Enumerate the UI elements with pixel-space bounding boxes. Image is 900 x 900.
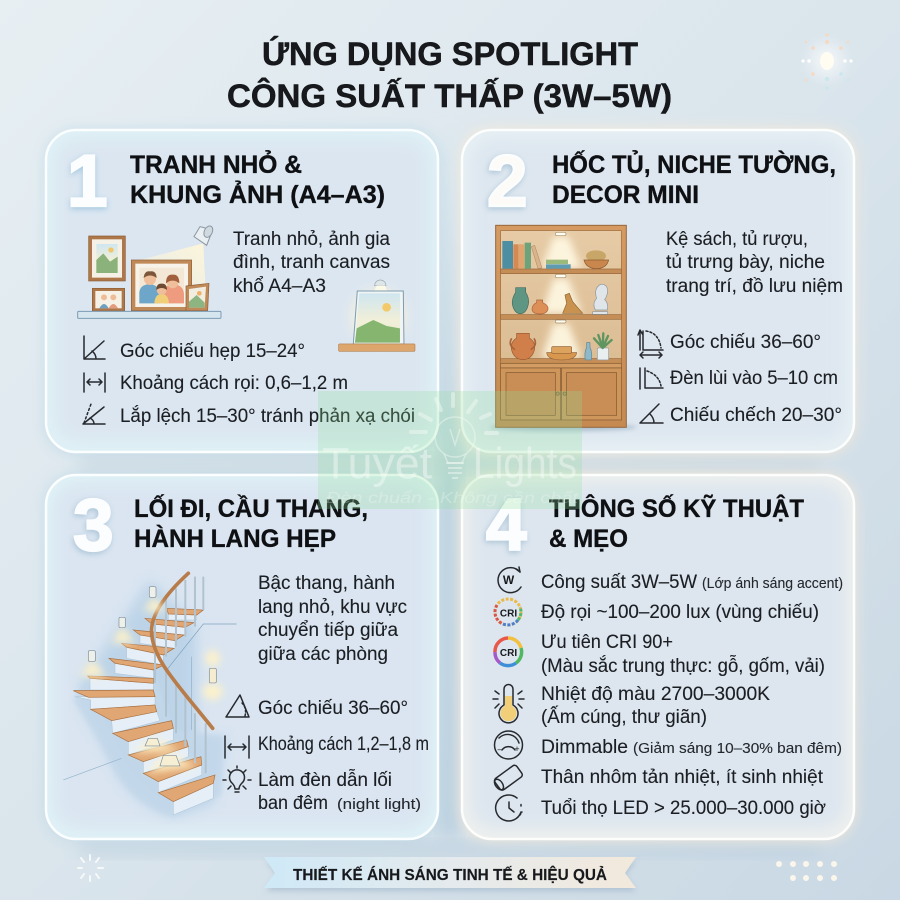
number 4: 4 (486, 485, 527, 566)
title (227, 35, 672, 114)
item: night light (223, 766, 421, 814)
light pools (542, 237, 582, 358)
spec: dimmable: + (514, 744, 520, 754)
description 2: trang trí, đồ lưu niệm (666, 276, 843, 297)
heading 4 (549, 493, 804, 553)
spec: thân nhôm (493, 764, 824, 791)
spec: công suất: Công suất 3W–5W (541, 572, 697, 593)
pottery (510, 333, 612, 360)
description 3: giữa các phòng (258, 644, 388, 665)
illustration: curved staircase with step lights (63, 573, 237, 817)
books (502, 241, 571, 269)
heading 3: HÀNH LANG HẸP (134, 524, 336, 553)
spec: độ rọi (495, 599, 819, 625)
description 1 (233, 229, 390, 297)
spec: nhiệt độ màu: (Ấm cúng, thư giãn) (541, 706, 707, 728)
watermark: Tuyết Lights: Lights (473, 439, 577, 488)
description 2 (666, 229, 843, 297)
watermark bulb icon (411, 394, 497, 478)
panel 4 card (459, 472, 857, 842)
item: lắp lệch: Lắp lệch 15–30° tránh phản xạ chói (120, 405, 415, 427)
illustration: framed photos on a shelf with spotlight (78, 225, 415, 351)
decoration: sparkle bottom left (78, 855, 103, 881)
wall and step lights (80, 587, 223, 773)
spotlight lamp (194, 225, 214, 245)
item: khoảng cách (225, 734, 429, 758)
number 3: 3 (73, 485, 114, 566)
number 1: 1 (67, 143, 108, 224)
spec: dimmable: Dimmable (541, 737, 628, 758)
description 3: chuyển tiếp giữa (258, 620, 398, 641)
panel 3 card (43, 472, 441, 842)
bowl of decor (584, 250, 609, 269)
panel: 1 tranh nhỏ và khung ảnh (43, 128, 441, 456)
spec: CRI 90+: Ưu tiên CRI 90+ (541, 632, 673, 653)
spec: dimmable: – (497, 744, 503, 754)
number 3: 3 (72, 487, 113, 568)
item: góc chiếu (638, 330, 821, 358)
spec: độ rọi: CRI (500, 608, 517, 620)
spec: tuổi thọ: Tuổi thọ LED > 25.000–30.000 giờ (541, 798, 826, 819)
balusters (155, 577, 206, 773)
number 2: 2 (487, 141, 528, 222)
watermark: Tuyết Lights: Tuyết (322, 439, 432, 488)
heading 2: DECOR MINI (552, 181, 699, 209)
panel: 2 hốc tủ, niche tường, decor mini (459, 127, 857, 455)
spec: CRI 90+ (495, 632, 825, 677)
item: khoảng cách rọi: Khoảng cách rọi: 0,6–1,2 m (120, 373, 348, 394)
item: khoảng cách: Khoảng cách 1,2–1,8 m (258, 734, 429, 755)
heading 1: TRANH NHỎ & (130, 149, 302, 179)
description 2: Kệ sách, tủ rượu, (666, 229, 808, 250)
item: đèn lùi vào: Đèn lùi vào 5–10 cm (670, 368, 838, 389)
heading 4: & MẸO (549, 525, 628, 553)
description 3: Bậc thang, hành (258, 573, 395, 594)
description 3 (258, 573, 407, 665)
item: góc chiếu hẹp: Góc chiếu hẹp 15–24° (120, 341, 305, 362)
heading 2: HỐC TỦ, NICHE TƯỜNG, (552, 149, 836, 179)
watermark: Tuyết Lights (318, 391, 582, 509)
number 4: 4 (485, 487, 526, 568)
panel: 4 thông số kỹ thuật và mẹo (459, 472, 857, 842)
item: night light: (night light) (337, 797, 421, 813)
stairs treads (73, 608, 215, 802)
spec: nhiệt độ màu: Nhiệt độ màu 2700–3000K (541, 684, 770, 705)
description 1: khổ A4–A3 (233, 276, 326, 297)
spec: dimmable (494, 731, 842, 759)
decoration: dots bottom right (776, 861, 837, 881)
spec: nhiệt độ màu (493, 684, 770, 728)
frame: family (131, 260, 192, 311)
banner: tagline: THIẾT KẾ ÁNH SÁNG TINH TẾ & HIỆU QUẢ (293, 865, 607, 884)
watermark: Tuyết Lights: Đèn chuẩn - Không cần chất (326, 489, 579, 507)
panel 1 card (43, 128, 441, 456)
spec: công suất: (Lớp ánh sáng accent) (702, 576, 843, 592)
icon: sparkle sun top right (801, 33, 853, 90)
spec: tuổi thọ (496, 795, 826, 821)
illustration: wooden cabinet with lights (490, 225, 637, 431)
frame: small right (186, 283, 209, 311)
stairs risers (75, 614, 213, 815)
title: ỨNG DỤNG SPOTLIGHT (262, 35, 638, 72)
spot lights (555, 232, 566, 323)
item: góc chiếu: Góc chiếu 36–60° (258, 698, 408, 719)
heading 3: LỐI ĐI, CẦU THANG, (134, 493, 368, 523)
spec: CRI 90+: CRI (500, 648, 517, 659)
item: night light: ban đêm (258, 793, 328, 814)
heading 4: THÔNG SỐ KỸ THUẬT (549, 493, 804, 523)
heading 2 (552, 149, 836, 209)
heading 3 (134, 493, 368, 553)
number 1: 1 (67, 141, 108, 222)
canvas with lamp (339, 280, 415, 351)
number 2: 2 (486, 143, 527, 224)
description 3: lang nhỏ, khu vực (258, 597, 407, 618)
item: night light: Làm đèn dẫn lối (258, 769, 392, 791)
title: CÔNG SUẤT THẤP (3W–5W) (227, 76, 672, 114)
panel 2 card (459, 127, 857, 455)
frame: couple (92, 288, 125, 311)
item: góc chiếu hẹp (84, 336, 305, 362)
wall shelf (78, 311, 221, 318)
spec: độ rọi: Độ rọi ~100–200 lux (vùng chiếu) (541, 602, 819, 623)
heading 1: KHUNG ẢNH (A4–A3) (130, 179, 385, 209)
frame: landscape (89, 236, 125, 281)
spec: thân nhôm: Thân nhôm tản nhiệt, ít sinh nhiệt (541, 767, 824, 788)
banner: tagline (264, 857, 636, 891)
spec: công suất: W (503, 573, 515, 587)
panel: 3 lối đi, cầu thang, hành lang hẹp (43, 472, 441, 842)
spec: công suất (498, 567, 843, 593)
cupboard doors (501, 363, 622, 420)
description 1: đình, tranh canvas (233, 252, 390, 273)
heading 1 (130, 149, 385, 209)
handrail (152, 573, 213, 728)
vases (512, 284, 608, 314)
spec: dimmable: (Giảm sáng 10–30% ban đêm) (633, 741, 842, 757)
spotlight cone (130, 243, 207, 310)
spec: CRI 90+: (Màu sắc trung thực: gỗ, gốm, vải) (541, 655, 825, 677)
shelves (501, 269, 621, 363)
item: góc chiếu: Góc chiếu 36–60° (670, 332, 821, 353)
description 2: tủ trưng bày, niche (666, 252, 825, 273)
item: chiếu chếch: Chiếu chếch 20–30° (670, 405, 842, 426)
description 1: Tranh nhỏ, ảnh gia (233, 229, 390, 250)
